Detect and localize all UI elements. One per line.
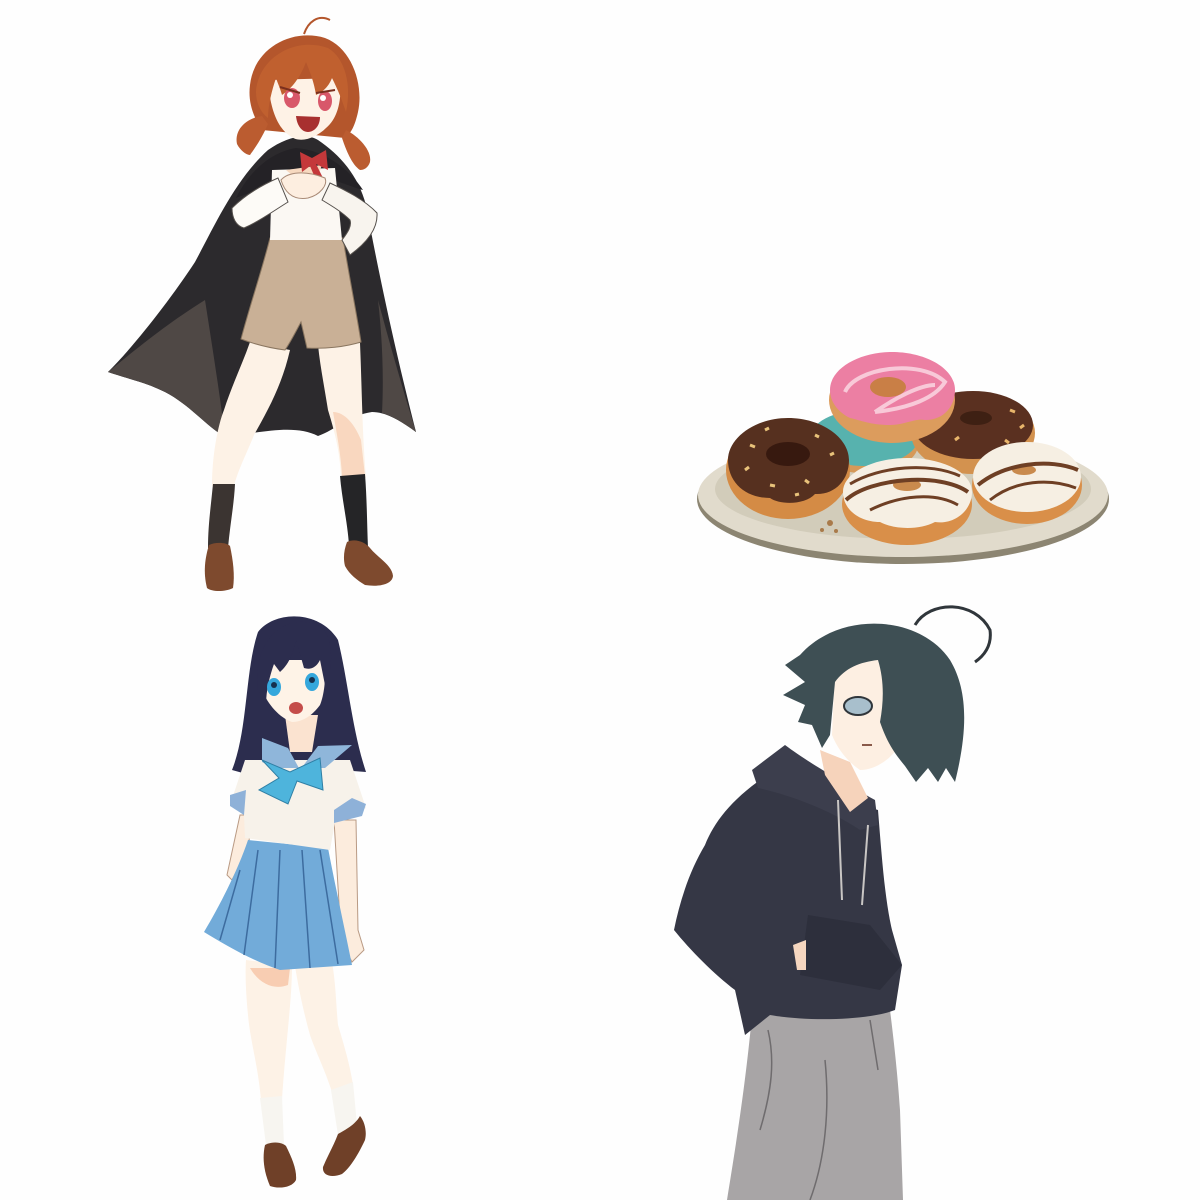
ahoge <box>915 607 990 662</box>
face <box>268 78 340 140</box>
bow <box>259 758 323 804</box>
drawstrings <box>838 800 868 905</box>
donut: white front centre <box>842 458 972 545</box>
donut: chocolate front left <box>726 418 850 519</box>
skirt <box>204 840 352 970</box>
trouser folds <box>760 1020 878 1200</box>
hair <box>783 624 964 782</box>
hand in pocket <box>793 940 806 970</box>
character: boy in hoodie <box>674 607 990 1200</box>
blouse <box>230 760 366 850</box>
trousers <box>727 995 903 1200</box>
mouth <box>862 744 872 746</box>
arms <box>227 815 364 962</box>
shorts <box>241 238 361 350</box>
neck <box>820 750 868 812</box>
eye <box>844 697 872 715</box>
hand on chest <box>281 173 326 198</box>
hoodie pocket <box>800 915 902 990</box>
donut: chocolate back right <box>911 391 1035 474</box>
eyes <box>267 673 319 696</box>
shirt and sleeves <box>232 165 377 255</box>
neck <box>285 715 318 752</box>
crumbs <box>820 520 838 533</box>
hood <box>752 745 878 830</box>
legs <box>246 960 353 1100</box>
shoes <box>264 1116 366 1188</box>
character: girl in sailor uniform <box>204 616 366 1188</box>
character: girl in black cape <box>108 18 416 591</box>
hair back <box>232 616 366 775</box>
plate of donuts <box>697 352 1109 564</box>
mouth <box>296 116 320 132</box>
hair back and pigtails <box>237 35 370 170</box>
donut: white right <box>972 442 1082 524</box>
legs <box>212 342 366 486</box>
plate <box>697 433 1109 564</box>
face <box>262 660 325 722</box>
cape <box>108 136 416 437</box>
ahoge <box>304 18 330 34</box>
sailor collar <box>262 738 352 770</box>
eyes <box>280 87 335 111</box>
fringe <box>257 622 331 705</box>
shoes <box>205 540 393 591</box>
socks <box>260 1082 357 1145</box>
donut: teal <box>810 410 918 473</box>
mouth <box>289 702 303 714</box>
ribbon <box>300 150 328 182</box>
face <box>832 655 900 770</box>
donut: pink <box>829 352 955 443</box>
hoodie body <box>674 770 902 1035</box>
fringe <box>256 45 348 118</box>
socks <box>208 474 368 548</box>
